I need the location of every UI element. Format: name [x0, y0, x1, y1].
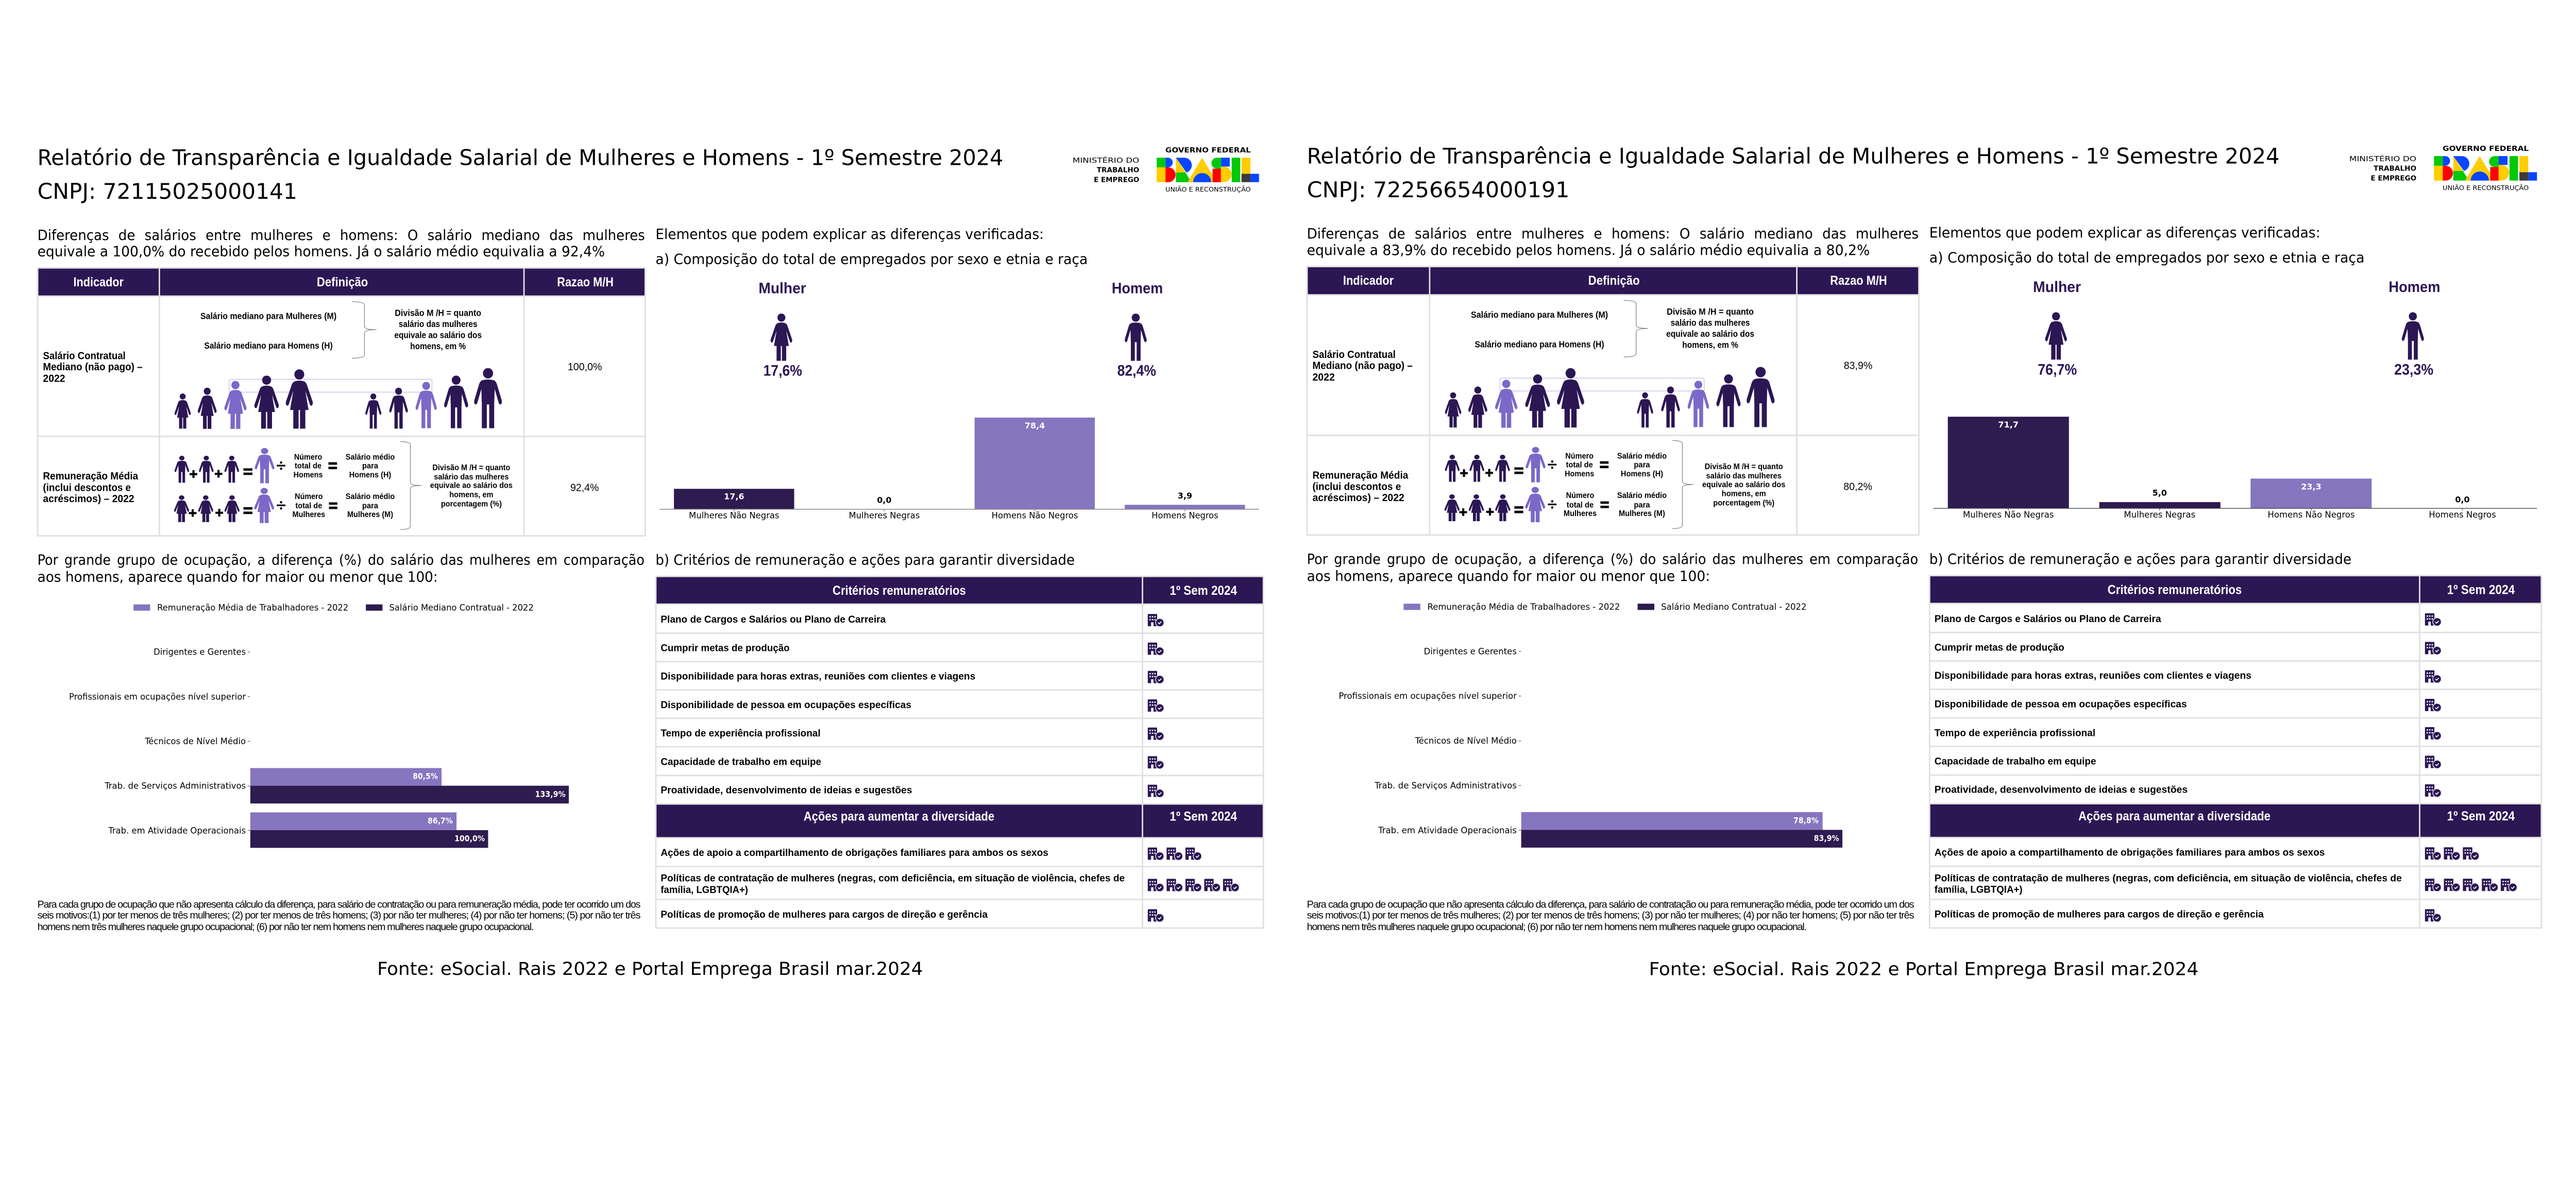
- header: diversity actions: Ações para aumentar a diversidade: [804, 810, 994, 824]
- table: criteria and diversity actions: [1929, 576, 2542, 928]
- action rows: [660, 848, 1240, 922]
- action rows: Políticas de promoção de mulheres para cargos de direção e gerência: [1935, 909, 2264, 920]
- footnote: [1307, 899, 1914, 933]
- row: Salário Contratual Mediano: Salário Contratual: [1312, 349, 1396, 360]
- logo: Ministério do Trabalho e Emprego, Governo Federal Brasil: UNIÃO E RECONSTRUÇÃO: [2443, 184, 2529, 192]
- table header: Razao M/H: [1830, 273, 1887, 288]
- row: Salário Contratual Mediano: 83,9%: [1844, 360, 1872, 372]
- header: diversity actions: 1º Sem 2024: [2447, 809, 2515, 823]
- row: Remuneração Média: total de: [295, 502, 323, 510]
- header: criteria: [833, 583, 1237, 598]
- row: Remuneração Média: acréscimos) – 2022: [43, 493, 134, 505]
- source note: Fonte: eSocial. Rais 2022 e Portal Emprega Brasil mar.2024: [377, 959, 923, 980]
- row: Remuneração Média: Número: [1565, 452, 1594, 460]
- stat: Mulher 76,7%: [2033, 279, 2081, 378]
- row: Salário Contratual Mediano: homens, em %: [1682, 340, 1738, 350]
- chart legend: [133, 602, 534, 612]
- row: Remuneração Média: total de: [295, 461, 321, 470]
- row: Remuneração Média: Homens (H): [349, 471, 391, 479]
- row: Salário Contratual Mediano: [1312, 300, 1872, 428]
- row: Salário Contratual Mediano: 100,0%: [568, 361, 602, 373]
- bar chart: ratio by occupation group: Trab. em Atividade Operacionais: [1378, 825, 1517, 835]
- header: criteria: [2108, 582, 2515, 597]
- text: salary differences summary: equivale a 83,9% do recebido pelos homens. Já o salário médio equivalia a 80,2%: [1307, 243, 1870, 259]
- text: salary differences summary: equivale a 100,0% do recebido pelos homens. Já o salário médio equivalia a 92,4%: [38, 244, 605, 260]
- action rows: Ações de apoio a compartilhamento de obrigações familiares para ambos os sexos: [1935, 847, 2325, 858]
- bar chart: composition by sex and race: Homens Negros: [1151, 510, 1218, 521]
- row: Remuneração Média: salário das mulheres: [1706, 472, 1782, 480]
- text: occupation group intro: [1307, 552, 1918, 585]
- bar chart: composition by sex and race: Homens Não Negros: [992, 510, 1078, 521]
- criteria rows: Plano de Cargos e Salários ou Plano de Carreira: [1935, 614, 2161, 625]
- row: Remuneração Média: Divisão M /H = quanto: [1705, 462, 1783, 471]
- bar chart: ratio by occupation group: Dirigentes e Gerentes: [154, 647, 246, 657]
- heading: elements that explain differences: [1929, 225, 2365, 266]
- row: Remuneração Média: Salário médio: [1617, 452, 1667, 460]
- bar chart: composition by sex and race: Mulheres Negras: [849, 510, 920, 521]
- logo: Ministério do Trabalho e Emprego, Governo Federal Brasil: MINISTÉRIO DO: [2349, 154, 2416, 163]
- row: Remuneração Média: para: [1634, 501, 1650, 509]
- logo: Ministério do Trabalho e Emprego, Governo Federal Brasil: TRABALHO: [1097, 167, 1139, 175]
- header: diversity actions: [2078, 809, 2515, 823]
- row: Salário Contratual Mediano: Divisão M /H = quanto: [395, 308, 481, 318]
- row: Remuneração Média: (inclui descontos e: [1312, 481, 1401, 492]
- header: criteria: 1º Sem 2024: [2447, 582, 2515, 597]
- row: Remuneração Média: Homens: [1565, 470, 1594, 478]
- criteria rows: Capacidade de trabalho em equipe: [660, 757, 821, 767]
- text: salary differences summary: Diferenças de salários entre mulheres e homens: O salário mediano das mulheres: [1307, 226, 1919, 242]
- header: criteria: Critérios remuneratórios: [833, 583, 966, 598]
- text: occupation group intro: Por grande grupo de ocupação, a diferença (%) do salário das mulheres em comparação: [38, 553, 645, 569]
- bar chart: composition by sex and race: Mulheres Não Negras: [689, 510, 779, 521]
- row: Remuneração Média: Mulheres: [292, 510, 325, 519]
- footnote: Para cada grupo de ocupação que não apresenta cálculo da diferença, para salário de contratação ou para remuneração média, pode ter ocorrido um dos: [1307, 899, 1914, 910]
- row: Remuneração Média: Mulheres (M): [347, 510, 393, 519]
- bar chart: ratio by occupation group: 80,5%: [413, 771, 438, 781]
- table header: Definição: [317, 275, 368, 289]
- row: Remuneração Média: Mulheres (M): [1619, 509, 1665, 518]
- bar chart: composition by sex and race: Homens Não Negros: [2268, 509, 2355, 520]
- row: Salário Contratual Mediano: salário das mulheres: [399, 319, 478, 329]
- action rows: Políticas de contratação de mulheres (negras, com deficiência, em situação de violência, chefes de: [660, 873, 1125, 884]
- row: Remuneração Média: [43, 442, 599, 529]
- row: Remuneração Média: acréscimos) – 2022: [1312, 492, 1404, 504]
- criteria rows: Disponibilidade de pessoa em ocupações específicas: [1935, 699, 2187, 710]
- logo: Ministério do Trabalho e Emprego, Governo Federal Brasil: E EMPREGO: [2370, 175, 2416, 182]
- bar chart: ratio by occupation group: Trab. em Atividade Operacionais: [108, 826, 246, 836]
- row: Remuneração Média: 92,4%: [570, 482, 599, 493]
- chart legend: Remuneração Média de Trabalhadores - 2022: [157, 602, 348, 612]
- action rows: Ações de apoio a compartilhamento de obrigações familiares para ambos os sexos: [660, 848, 1048, 858]
- logo: Ministério do Trabalho e Emprego, Governo Federal Brasil: MINISTÉRIO DO: [1073, 157, 1139, 165]
- table header: Indicador: [73, 275, 124, 289]
- title: Relatório de Transparência e Igualdade Salarial de Mulheres e Homens - 1º Semestre 2024: [38, 145, 1003, 170]
- row: Remuneração Média: homens, em: [1722, 490, 1766, 499]
- text: occupation group intro: [38, 553, 645, 585]
- bar chart: composition by sex and race: 3,9: [1178, 491, 1192, 501]
- action rows: Políticas de contratação de mulheres (negras, com deficiência, em situação de violência, chefes de: [1935, 873, 2402, 884]
- chart legend: Remuneração Média de Trabalhadores - 2022: [1428, 602, 1620, 612]
- text: occupation group intro: aos homens, aparece quando for maior ou menor que 100:: [38, 569, 438, 585]
- logo: Ministério do Trabalho e Emprego, Governo Federal Brasil: UNIÃO E RECONSTRUÇÃO: [1165, 185, 1251, 193]
- row: Salário Contratual Mediano: Salário mediano para Mulheres (M): [1471, 310, 1608, 320]
- stat: Homem 82,4%: [1112, 280, 1163, 380]
- footnote: homens nem três mulheres naquele grupo ocupacional; (6) por não ter nem homens nem mulheres naquele grupo ocupacional.: [1307, 921, 1807, 933]
- row: Remuneração Média: Homens (H): [1621, 470, 1663, 478]
- action rows: [1935, 847, 2517, 922]
- bar chart: ratio by occupation group: Dirigentes e Gerentes: [1424, 646, 1517, 656]
- row: Salário Contratual Mediano: [43, 302, 602, 429]
- stat: Mulher 17,6%: [758, 280, 806, 380]
- row: Remuneração Média: Remuneração Média: [1312, 469, 1409, 481]
- bar chart: ratio by occupation group: Profissionais em ocupações nível superior: [1338, 691, 1517, 701]
- stat: Mulher 76,7%: Mulher: [2033, 279, 2081, 296]
- bar chart: composition by sex and race: 78,4: [1025, 421, 1045, 431]
- row: Salário Contratual Mediano: Mediano (não pago) –: [43, 361, 143, 373]
- criteria rows: [660, 614, 1164, 798]
- table header: Indicador: [1343, 273, 1394, 288]
- heading: elements that explain differences: [655, 227, 1088, 267]
- table: indicators and definitions: [1307, 267, 1919, 535]
- stat: Homem 82,4%: Homem: [1112, 280, 1163, 297]
- panel: report CNPJ 72256654000191: [1307, 144, 2542, 980]
- stat: Homem 23,3%: [2388, 279, 2440, 378]
- bar chart: ratio by occupation group: Técnicos de Nível Médio: [144, 736, 246, 746]
- row: Remuneração Média: Salário médio: [346, 492, 395, 501]
- row: Remuneração Média: porcentagem (%): [1713, 499, 1774, 508]
- heading: criteria and actions: b) Critérios de remuneração e ações para garantir diversidade: [655, 552, 1075, 568]
- bar chart: composition by sex and race: 23,3: [2301, 482, 2321, 492]
- table header: Definição: [1588, 273, 1640, 288]
- row: Salário Contratual Mediano: 2022: [1312, 371, 1335, 383]
- bar chart: composition by sex and race: 71,7: [1998, 420, 2019, 430]
- action rows: família, LGBTQIA+): [660, 885, 748, 896]
- table: criteria and diversity actions: [655, 576, 1264, 928]
- bar chart: composition by sex and race: Mulheres Não Negras: [1963, 509, 2054, 520]
- row: Remuneração Média: para: [1634, 460, 1650, 469]
- header: criteria: Critérios remuneratórios: [2108, 582, 2242, 597]
- panel: report CNPJ 72115025000141: [37, 145, 1264, 980]
- row: Remuneração Média: Número: [294, 453, 322, 461]
- row: Remuneração Média: equivale ao salário dos: [430, 482, 513, 490]
- header: criteria: 1º Sem 2024: [1170, 583, 1237, 598]
- bar chart: composition by sex and race: Homens Negros: [2429, 509, 2496, 520]
- stat: Mulher 17,6%: Mulher: [758, 280, 806, 297]
- heading: elements that explain differences: Elementos que podem explicar as diferenças verificadas:: [1929, 225, 2320, 241]
- row: Salário Contratual Mediano: equivale ao salário dos: [1666, 329, 1754, 339]
- criteria rows: Cumprir metas de produção: [660, 643, 790, 654]
- logo: Ministério do Trabalho e Emprego, Governo Federal Brasil: [2349, 145, 2537, 192]
- bar chart: ratio by occupation group: 100,0%: [454, 834, 485, 844]
- row: Salário Contratual Mediano: Salário Contratual: [43, 350, 126, 362]
- title: CNPJ: 72115025000141: [38, 179, 297, 204]
- bar chart: composition by sex and race: 0,0: [877, 495, 891, 505]
- criteria rows: Tempo de experiência profissional: [660, 728, 821, 739]
- bar chart: ratio by occupation group: Profissionais em ocupações nível superior: [69, 691, 246, 701]
- text: salary differences summary: Diferenças de salários entre mulheres e homens: O salário mediano das mulheres: [38, 228, 645, 244]
- stat: Mulher 76,7%: 76,7%: [2038, 362, 2077, 378]
- row: Remuneração Média: total de: [1567, 501, 1594, 509]
- footnote: homens nem três mulheres naquele grupo ocupacional; (6) por não ter nem homens nem mulheres naquele grupo ocupacional.: [38, 921, 534, 933]
- row: Remuneração Média: Remuneração Média: [43, 470, 139, 482]
- row: Remuneração Média: equivale ao salário dos: [1702, 480, 1786, 489]
- chart legend: Salário Mediano Contratual - 2022: [1661, 602, 1806, 612]
- heading: elements that explain differences: Elementos que podem explicar as diferenças verificadas:: [655, 227, 1044, 243]
- table: indicators and definitions: [37, 268, 646, 536]
- text: salary differences summary: [1307, 226, 1919, 259]
- bar chart: ratio by occupation group: Trab. de Serviços Administrativos: [104, 781, 246, 791]
- table header: [73, 275, 614, 289]
- bar chart: ratio by occupation group: 78,8%: [1793, 816, 1819, 826]
- row: Remuneração Média: para: [362, 502, 378, 510]
- row: Remuneração Média: Número: [295, 492, 323, 501]
- bar chart: composition by sex and race: 17,6: [724, 491, 744, 501]
- row: Salário Contratual Mediano: Divisão M /H = quanto: [1667, 306, 1754, 317]
- header: diversity actions: 1º Sem 2024: [1170, 810, 1237, 824]
- heading: criteria and actions: b) Critérios de remuneração e ações para garantir diversidade: [1929, 552, 2351, 568]
- stat: Homem 23,3%: 23,3%: [2394, 362, 2433, 378]
- title: Relatório de Transparência e Igualdade Salarial de Mulheres e Homens - 1º Semestre 2024: [1307, 144, 2279, 168]
- title: [1307, 144, 2279, 202]
- logo: Ministério do Trabalho e Emprego, Governo Federal Brasil: E EMPREGO: [1094, 176, 1139, 184]
- logo: Ministério do Trabalho e Emprego, Governo Federal Brasil: [1073, 147, 1259, 193]
- criteria rows: Disponibilidade para horas extras, reuniões com clientes e viagens: [660, 671, 975, 682]
- bar chart: composition by sex and race: [1934, 417, 2537, 520]
- bar chart: ratio by occupation group: [69, 647, 569, 848]
- text: salary differences summary: [38, 228, 645, 260]
- bar chart: ratio by occupation group: [1338, 646, 1842, 848]
- bar chart: composition by sex and race: Mulheres Negras: [2124, 509, 2195, 520]
- source note: Fonte: eSocial. Rais 2022 e Portal Emprega Brasil mar.2024: [1649, 959, 2198, 980]
- criteria rows: Disponibilidade de pessoa em ocupações específicas: [660, 700, 911, 711]
- row: Salário Contratual Mediano: Salário mediano para Mulheres (M): [200, 311, 336, 321]
- table header: Razao M/H: [557, 275, 614, 289]
- chart legend: Salário Mediano Contratual - 2022: [389, 602, 534, 612]
- logo: Ministério do Trabalho e Emprego, Governo Federal Brasil: GOVERNO FEDERAL: [2443, 145, 2529, 153]
- bar chart: ratio by occupation group: 86,7%: [428, 816, 453, 826]
- logo: Ministério do Trabalho e Emprego, Governo Federal Brasil: TRABALHO: [2374, 165, 2416, 173]
- criteria rows: Proatividade, desenvolvimento de ideias e sugestões: [1935, 785, 2188, 796]
- title: [38, 145, 1003, 204]
- stat: Homem 82,4%: 82,4%: [1117, 363, 1156, 380]
- footnote: seis motivos:(1) por ter menos de três mulheres; (2) por ter menos de três homens; (3) por não ter mulheres; (4) por não ter homens; (5) por não ter três: [38, 910, 641, 921]
- bar chart: composition by sex and race: [659, 418, 1259, 521]
- bar chart: composition by sex and race: 5,0: [2153, 488, 2167, 498]
- row: Salário Contratual Mediano: salário das mulheres: [1671, 317, 1750, 328]
- header: diversity actions: [804, 810, 1237, 824]
- row: Remuneração Média: Divisão M /H = quanto: [432, 463, 511, 472]
- footnote: seis motivos:(1) por ter menos de três mulheres; (2) por ter menos de três homens; (3) por não ter mulheres; (4) por não ter homens; (5) por não ter três: [1307, 910, 1914, 921]
- row: Remuneração Média: homens, em: [449, 491, 494, 500]
- bar chart: ratio by occupation group: Técnicos de Nível Médio: [1415, 735, 1517, 746]
- row: Remuneração Média: Homens: [294, 471, 323, 479]
- bar chart: ratio by occupation group: 133,9%: [535, 789, 566, 799]
- row: Remuneração Média: total de: [1566, 460, 1593, 469]
- criteria rows: Capacidade de trabalho em equipe: [1935, 757, 2096, 767]
- action rows: Políticas de promoção de mulheres para cargos de direção e gerência: [660, 909, 988, 920]
- text: occupation group intro: Por grande grupo de ocupação, a diferença (%) do salário das mulheres em comparação: [1307, 552, 1918, 568]
- criteria rows: Disponibilidade para horas extras, reuniões com clientes e viagens: [1935, 671, 2251, 681]
- row: Remuneração Média: (inclui descontos e: [43, 482, 131, 493]
- criteria rows: Plano de Cargos e Salários ou Plano de Carreira: [660, 614, 886, 625]
- row: Salário Contratual Mediano: Salário mediano para Homens (H): [204, 340, 333, 351]
- bar chart: ratio by occupation group: 83,9%: [1814, 833, 1839, 843]
- row: Remuneração Média: para: [362, 461, 378, 470]
- chart legend: [1403, 602, 1806, 612]
- footnote: Para cada grupo de ocupação que não apresenta cálculo da diferença, para salário de contratação ou para remuneração média, pode ter ocorrido um dos: [38, 899, 641, 911]
- text: occupation group intro: aos homens, aparece quando for maior ou menor que 100:: [1307, 569, 1710, 585]
- action rows: família, LGBTQIA+): [1935, 885, 2023, 896]
- criteria rows: Cumprir metas de produção: [1935, 642, 2064, 653]
- row: Remuneração Média: Mulheres: [1564, 509, 1597, 518]
- row: Remuneração Média: [1312, 440, 1872, 528]
- criteria rows: [1935, 613, 2442, 798]
- row: Remuneração Média: Salário médio: [1617, 491, 1667, 500]
- row: Salário Contratual Mediano: homens, em %: [410, 341, 466, 351]
- heading: elements that explain differences: a) Composição do total de empregados por sexo e etnia e raça: [1929, 250, 2365, 266]
- stat: Homem 23,3%: Homem: [2388, 279, 2440, 296]
- row: Salário Contratual Mediano: equivale ao salário dos: [394, 330, 482, 340]
- bar chart: ratio by occupation group: Trab. de Serviços Administrativos: [1374, 780, 1517, 791]
- row: Remuneração Média: salário das mulheres: [434, 473, 509, 482]
- bar chart: composition by sex and race: 0,0: [2455, 495, 2470, 505]
- criteria rows: Proatividade, desenvolvimento de ideias e sugestões: [660, 785, 912, 796]
- logo: Ministério do Trabalho e Emprego, Governo Federal Brasil: GOVERNO FEDERAL: [1165, 147, 1251, 154]
- row: Remuneração Média: 80,2%: [1843, 481, 1872, 492]
- row: Remuneração Média: porcentagem (%): [441, 500, 502, 508]
- stat: Mulher 17,6%: 17,6%: [763, 363, 802, 380]
- table header: [1343, 273, 1887, 288]
- row: Remuneração Média: Salário médio: [346, 453, 395, 461]
- row: Salário Contratual Mediano: Salário mediano para Homens (H): [1475, 339, 1604, 349]
- row: Salário Contratual Mediano: 2022: [43, 372, 65, 384]
- row: Remuneração Média: Número: [1566, 491, 1594, 500]
- header: diversity actions: Ações para aumentar a diversidade: [2078, 809, 2270, 823]
- row: Salário Contratual Mediano: Mediano (não pago) –: [1312, 360, 1413, 372]
- title: CNPJ: 72256654000191: [1307, 177, 1569, 202]
- footnote: [38, 899, 641, 933]
- criteria rows: Tempo de experiência profissional: [1935, 728, 2095, 739]
- heading: elements that explain differences: a) Composição do total de empregados por sexo e etnia e raça: [655, 251, 1088, 267]
